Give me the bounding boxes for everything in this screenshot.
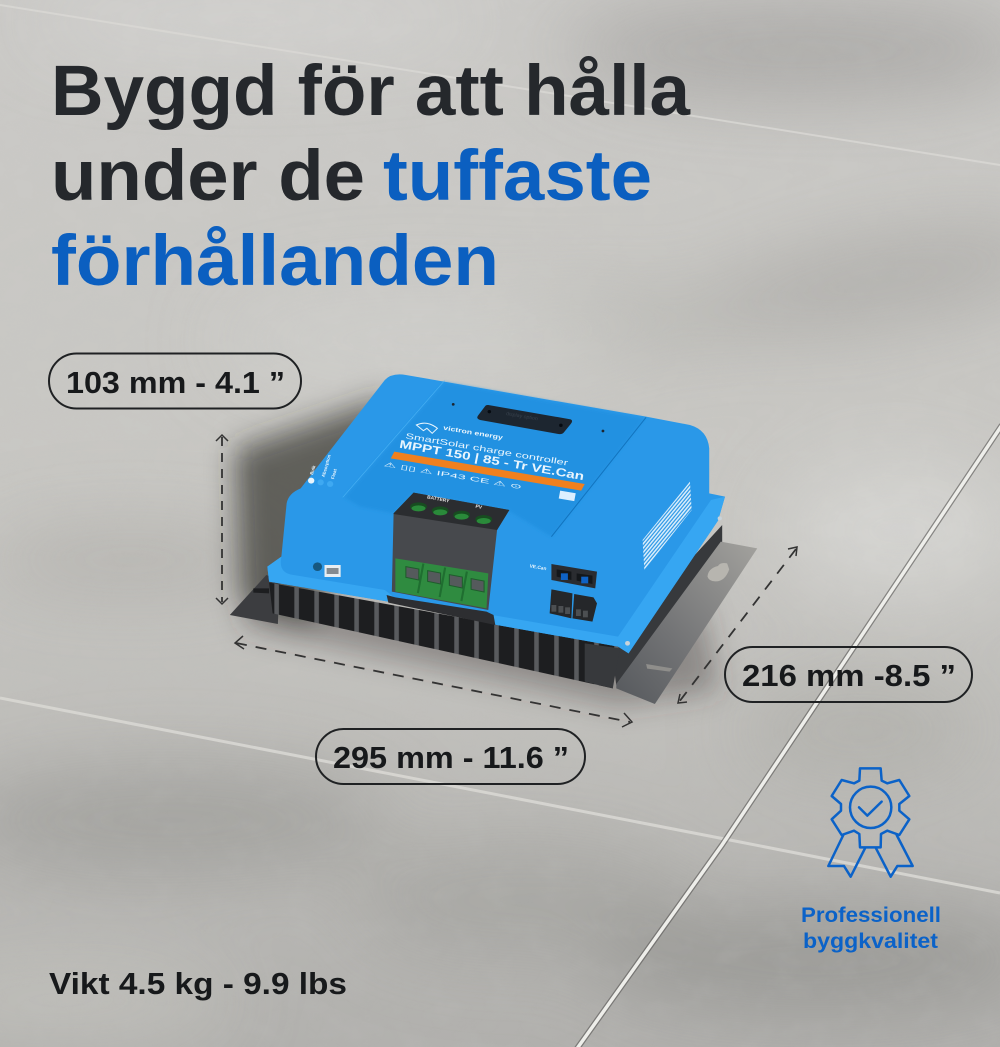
badge label: Professionell <box>801 904 941 927</box>
product: solar charge controller <box>230 374 757 704</box>
title <box>51 52 691 301</box>
icon: quality badge <box>828 768 913 877</box>
front label printing: victron energy <box>443 425 504 442</box>
dimension arrow: width <box>678 547 797 703</box>
brand logo mark <box>416 423 437 433</box>
title: förhållanden <box>51 222 499 301</box>
dimension pill: width <box>725 647 972 702</box>
communication ports <box>529 563 597 622</box>
terminal shroud <box>387 595 495 625</box>
device shadow <box>235 395 720 705</box>
side rating label <box>643 482 692 570</box>
dimension pill: width: 216 mm -8.5 ” <box>742 658 956 693</box>
front label printing: ⚠ ▯▯ ⚠ IP43 CE ⚠ ⊙ <box>383 460 524 491</box>
heatsink fins <box>269 583 620 688</box>
USB port <box>313 562 341 577</box>
front label printing <box>308 423 585 501</box>
dimension arrow: height <box>216 435 228 604</box>
dimension pill: length <box>316 729 585 784</box>
front label printing: SmartSolar charge controller <box>405 432 569 468</box>
front label printing: Bulk <box>309 464 317 475</box>
main terminal block <box>392 493 509 610</box>
base plate flanges <box>230 525 757 704</box>
display cover <box>477 405 572 434</box>
front label printing: MPPT 150 | 85 - Tr VE.Can <box>398 438 585 483</box>
communication ports: VE.Can <box>529 563 547 572</box>
main terminal block: PV <box>475 504 483 511</box>
front label printing: Float <box>330 468 338 480</box>
front label printing: Absorption <box>321 454 332 478</box>
dimension arrow: length <box>235 636 632 727</box>
mounting screws <box>625 641 630 646</box>
badge label <box>801 904 941 953</box>
title: under de <box>51 137 365 216</box>
title: tuffaste <box>383 137 652 216</box>
main terminal block: BATTERY <box>427 495 451 504</box>
dimension pill: height <box>49 354 301 408</box>
badge label: byggkvalitet <box>803 930 938 953</box>
display cover: display option <box>505 411 538 422</box>
dimension pill: height: 103 mm - 4.1 ” <box>66 365 285 400</box>
weight note: Vikt 4.5 kg - 9.9 lbs <box>49 966 347 1001</box>
dimension pill: length: 295 mm - 11.6 ” <box>333 740 569 775</box>
blue housing <box>267 374 725 653</box>
title: Byggd för att hålla <box>51 52 691 131</box>
